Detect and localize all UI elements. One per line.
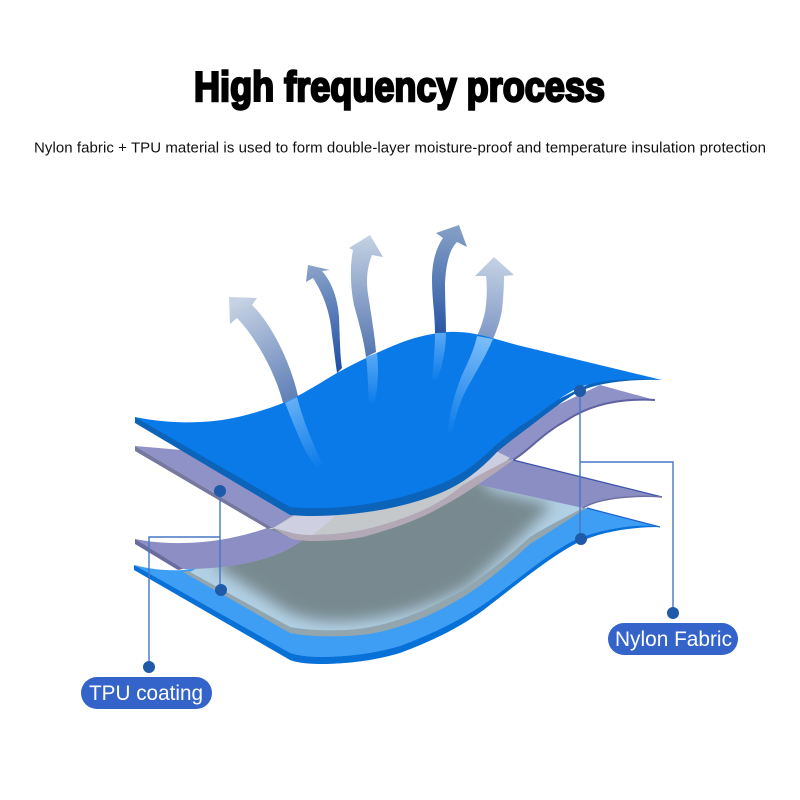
see-through trail 3 bbox=[366, 353, 378, 405]
title: High frequency process bbox=[194, 63, 605, 110]
second layer: TPU coating bbox=[135, 385, 655, 541]
arrow 2 bbox=[306, 265, 342, 373]
subtitle text: Nylon fabric + TPU material is used to form double-layer moisture-proof and temperature insulation protection bbox=[34, 140, 766, 156]
second layer front edge bbox=[273, 460, 513, 541]
bottom layer: nylon fabric bbox=[134, 508, 660, 664]
pill text: TPU coating bbox=[89, 681, 203, 705]
second layer lilac left of light section bbox=[273, 512, 340, 535]
second layer lilac right of light section bbox=[463, 448, 510, 485]
arrow 1 bbox=[229, 297, 298, 403]
bottom layer face bbox=[134, 508, 658, 657]
coating purple right bbox=[470, 460, 662, 508]
top layer edge bbox=[135, 376, 662, 516]
leader lines bbox=[580, 391, 673, 613]
callout: Nylon Fabric bbox=[574, 385, 738, 655]
dot upper bbox=[574, 385, 586, 397]
middle layer: TPU coating bbox=[135, 460, 662, 636]
arrows: vapor rising bbox=[229, 225, 514, 403]
pill text: Nylon Fabric bbox=[615, 627, 732, 651]
dot upper bbox=[214, 485, 226, 497]
pill bbox=[81, 677, 212, 709]
second layer left edge bbox=[135, 446, 273, 529]
coating dark blurred center bbox=[215, 475, 552, 622]
arrow 3 bbox=[349, 235, 383, 357]
bottom layer rear highlight bbox=[587, 508, 660, 527]
second layer light section bbox=[273, 450, 508, 535]
arrow 4 bbox=[432, 225, 467, 333]
dot label bbox=[143, 661, 155, 673]
callout: TPU coating bbox=[81, 485, 227, 709]
coating gray face bbox=[190, 480, 583, 630]
coating left edge bbox=[135, 539, 183, 570]
top layer face bbox=[135, 332, 662, 508]
pill bbox=[608, 623, 738, 655]
see-through trail 4 bbox=[432, 333, 446, 382]
top layer: nylon fabric bbox=[135, 332, 662, 516]
coating purple left bbox=[135, 528, 302, 569]
see-through trail 1 bbox=[285, 397, 324, 468]
leader lines bbox=[149, 491, 220, 667]
second layer right edge bbox=[513, 400, 655, 460]
coating rear edge bbox=[513, 460, 662, 497]
see-through trail 5 bbox=[448, 336, 493, 435]
bottom layer edge bbox=[134, 524, 660, 664]
second layer purple face bbox=[135, 385, 655, 528]
dot label bbox=[667, 607, 679, 619]
dot lower bbox=[575, 533, 587, 545]
dot lower bbox=[215, 584, 227, 596]
arrow 5 bbox=[475, 257, 514, 339]
coating front edge bbox=[183, 507, 585, 636]
